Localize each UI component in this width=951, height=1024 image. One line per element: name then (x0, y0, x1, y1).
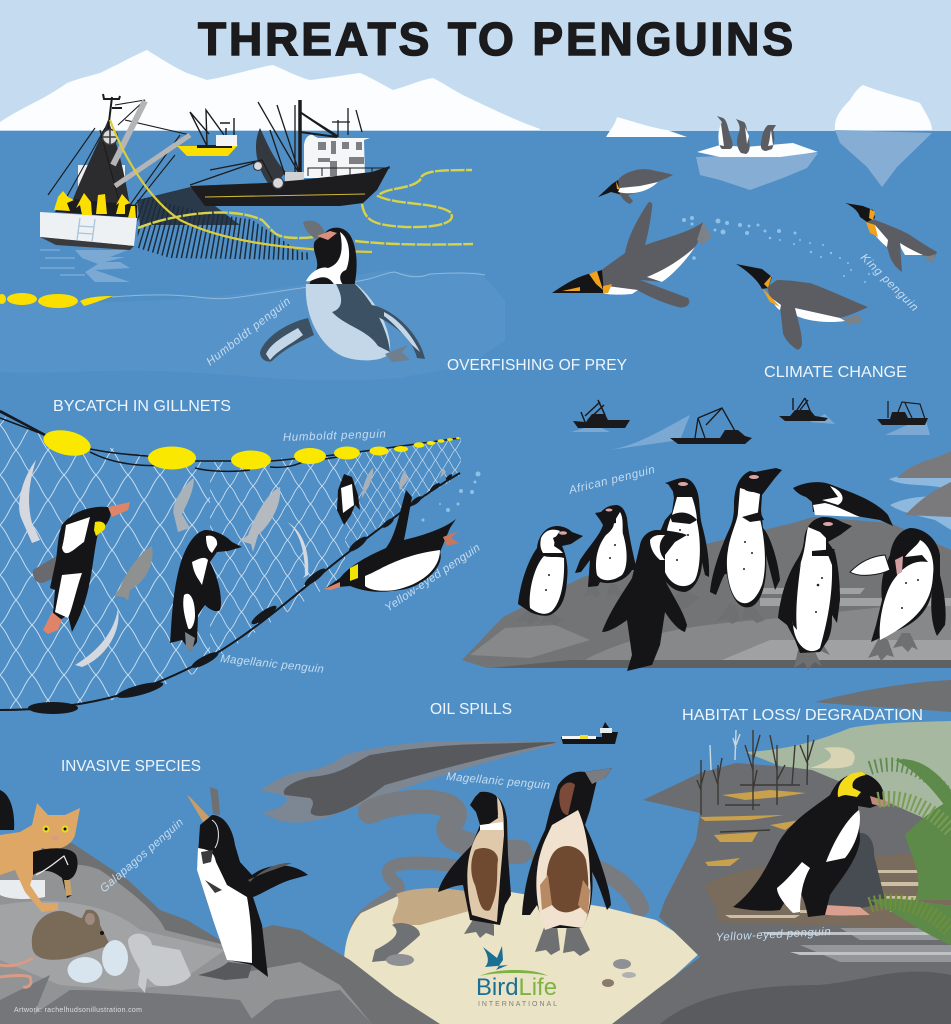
large black trawler (190, 100, 390, 206)
rocks (0, 843, 440, 1024)
african penguin 6 (foreground dark) (602, 530, 687, 671)
label: humboldt penguin bycatch: Humboldt penguin (283, 428, 386, 444)
african penguin 5 (lying) (793, 482, 893, 526)
mountain band (815, 680, 951, 712)
yellow-eyed penguin (733, 772, 893, 917)
ice floe with king penguins (696, 116, 818, 190)
humboldt penguin catching fish (260, 221, 425, 362)
label: galapagos penguin: Galapagos penguin (98, 817, 186, 895)
BirdLife logo (476, 946, 557, 1008)
panel: oil spills (260, 701, 703, 1024)
panel: overfishing of prey (0, 94, 627, 380)
label: african penguin: African penguin (567, 464, 656, 497)
chick (128, 934, 191, 993)
rocky land (612, 763, 951, 1024)
label: invasive species: INVASIVE SPECIES (61, 758, 201, 775)
label: king penguin: King penguin (858, 252, 920, 314)
label: habitat loss: HABITAT LOSS/ DEGRADATION (682, 707, 923, 724)
king penguin: small diving (598, 169, 673, 204)
mouse (0, 910, 110, 987)
yellow floats on surface (0, 272, 485, 308)
sky (0, 0, 951, 131)
african penguin 4 (tall) (710, 468, 782, 624)
BirdLife logo: INTERNATIONAL (478, 1001, 557, 1008)
african penguin 7 (778, 517, 852, 670)
african penguin 2 (575, 505, 637, 598)
chick (822, 833, 885, 909)
king penguin: large diving (552, 202, 712, 307)
african penguin 1 (516, 526, 583, 626)
label: magellanic penguin oil: Magellanic penguin (446, 771, 550, 792)
label: overfishing: OVERFISHING OF PREY (447, 357, 627, 374)
oiled magellanic penguin left (438, 792, 511, 938)
panel: bycatch in gillnets (0, 398, 483, 714)
beach (344, 890, 703, 1024)
panel: climate change (552, 85, 937, 381)
label: oil spills: OIL SPILLS (430, 701, 512, 718)
boat reflection (40, 250, 85, 275)
label: bycatch: BYCATCH IN GILLNETS (53, 398, 231, 415)
gillnet mesh (0, 410, 462, 710)
green hillside (745, 721, 951, 850)
label: humboldt penguin: Humboldt penguin (204, 295, 293, 368)
yellow float lines (138, 170, 473, 245)
iceberg (835, 85, 932, 187)
small iceberg (606, 117, 687, 137)
magellanic penguin in net (170, 530, 242, 652)
panel: African penguin colony (462, 451, 951, 671)
ferns (870, 759, 951, 945)
label: climate change: CLIMATE CHANGE (764, 364, 907, 381)
artwork credit: Artwork: rachelhudsonillustration.com (14, 1007, 142, 1014)
label: yellow-eyed penguin: Yellow-eyed penguin (383, 542, 483, 614)
panel: invasive species (0, 758, 440, 1024)
scorched straw (700, 790, 806, 866)
oiled magellanic penguin right (522, 768, 612, 956)
yellow-eyed penguin escaping net (324, 490, 459, 592)
label: yellow-eyed penguin habitat: Yellow-eyed penguin (716, 926, 831, 944)
bubbles (682, 216, 870, 283)
african penguin 8 (preening) (850, 528, 946, 661)
king penguin: lower (736, 264, 868, 350)
tanker (561, 722, 618, 744)
panel: habitat loss (612, 680, 951, 1024)
title: THREATS TO PENGUINS (198, 13, 793, 65)
distant headlands (889, 472, 951, 530)
african penguin 3 (back) (650, 478, 709, 610)
fishing fleet silhouettes (571, 398, 930, 450)
label: magellanic penguin: Magellanic penguin (220, 653, 324, 676)
crew in yellow (54, 191, 136, 218)
fishing boat with crew (40, 94, 380, 265)
distant yellow boat (177, 110, 238, 156)
burnt trees (697, 730, 814, 832)
BirdLife logo: BirdLife (476, 974, 557, 1001)
lead rope bottom (0, 473, 460, 714)
king penguin: right top (845, 203, 937, 272)
yellow-eyed penguin in net (33, 502, 130, 634)
cat with penguin (0, 790, 80, 912)
oil slick (260, 741, 640, 958)
humboldt small in net (337, 474, 360, 525)
galapagos penguin (187, 787, 308, 980)
float rope top (0, 411, 460, 471)
snow-capped mountains (0, 50, 540, 130)
eggs (68, 940, 128, 983)
rock (462, 517, 951, 668)
fish (19, 460, 446, 667)
